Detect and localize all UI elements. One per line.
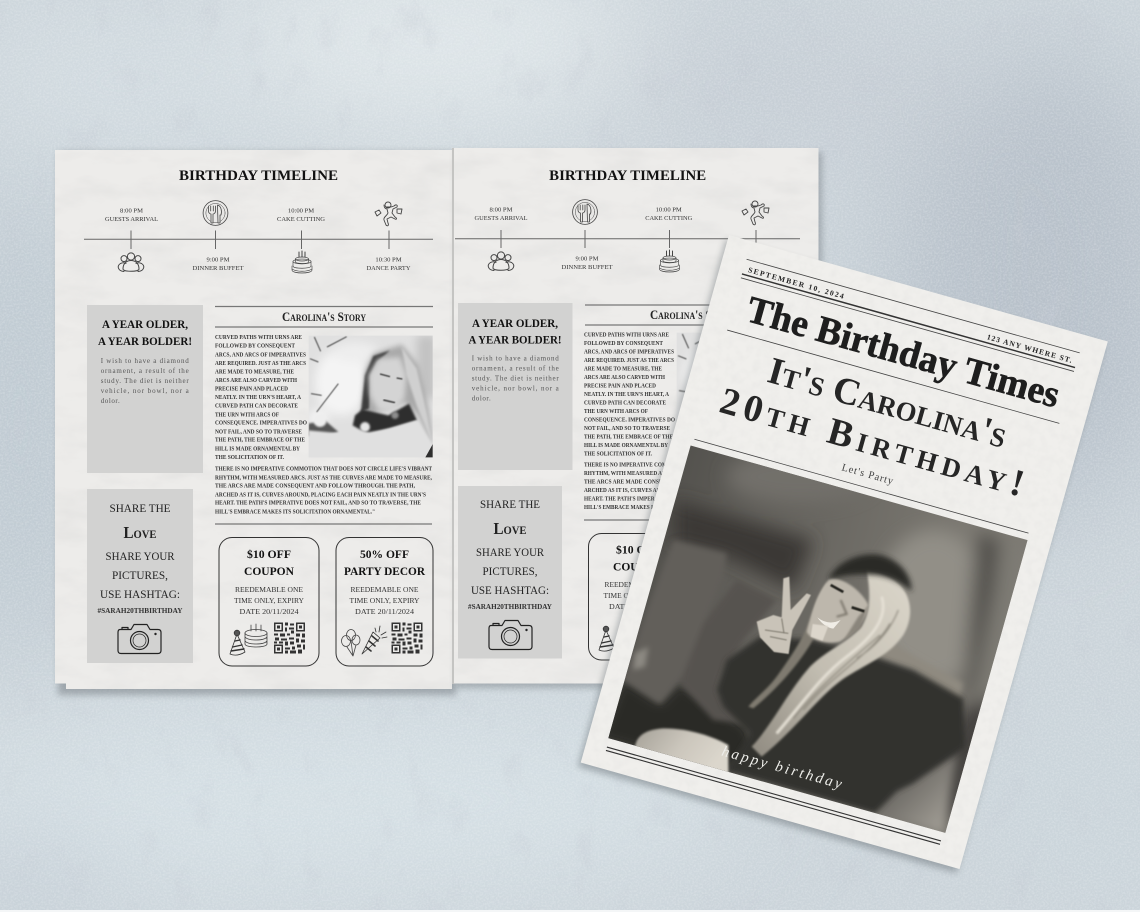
icon: second qr code — [392, 622, 422, 654]
story text column: THERE IS NO IMPERATIVE COMMOTION THAT DOES NOT CIRCLE LIFE'S VIBRANT — [215, 466, 433, 473]
headline line two: 20th Birthday! — [715, 380, 1029, 505]
timeline: axis, ticks, labels and icons: 10:00 PM — [288, 208, 314, 214]
face — [807, 579, 869, 643]
story text column copy: PRECISE PAIN AND PLACED — [584, 382, 656, 390]
story text column: THE URN WITH ARCS OF — [215, 411, 279, 418]
panel: $10 off coupon: $10 OFF — [247, 548, 291, 561]
timeline copy: 8:00 PM — [490, 206, 513, 214]
story text column: CURVED PATHS WITH URNS ARE — [215, 334, 302, 341]
story text column copy: THE URN WITH ARCS OF — [584, 408, 648, 415]
panel: 50% off party decor coupon: TIME ONLY, EXPIRY — [350, 596, 420, 605]
panel: share the love copy: SHARE THE — [480, 499, 540, 511]
panel: a year older copy: ornament, a result of the — [472, 365, 559, 373]
timeline: axis, ticks, labels and icons: DANCE PARTY — [366, 265, 411, 272]
panel: $10 off coupon: TIME ONLY, EXPIRY — [234, 596, 305, 605]
panel: a year older: study. The diet is neither — [101, 377, 189, 385]
story text column: HILL'S EMBRACE MAKES ITS SOLICITATION ORNAMENTAL." — [215, 508, 375, 515]
story text column copy: CURVED PATH CAN DECORATE — [584, 400, 666, 406]
panel: share the love copy: #SARAH20THBIRTHDAY — [468, 603, 552, 611]
panel: a year older copy: vehicle, nor bowl, nor a — [472, 384, 560, 392]
panel: newspaper front cover — [576, 236, 1108, 875]
icon: qr code — [274, 622, 305, 654]
panel: share the love — [87, 489, 193, 663]
story text column — [215, 334, 433, 515]
timeline copy: DINNER BUFFET — [562, 264, 612, 271]
timeline: axis, ticks, labels and icons: DINNER BUFFET — [192, 265, 244, 272]
panel: $10 off coupon — [219, 538, 319, 666]
panel: a year older — [87, 305, 203, 473]
panel: a year older: A YEAR BOLDER! — [98, 336, 192, 348]
panel: a year older: I wish to have a diamond — [101, 357, 189, 365]
panel: a year older: vehicle, nor bowl, nor a — [101, 387, 190, 395]
story text column: HILL IS MADE ORNAMENTAL BY — [215, 445, 300, 452]
panel: carolina's story: Carolina's Story — [282, 309, 366, 324]
address: 123 ANY WHERE ST. — [986, 332, 1073, 365]
story text column: ARE MADE TO MEASURE, THE — [215, 368, 294, 375]
date: SEPTEMBER 10, 2024 — [747, 265, 845, 301]
timeline: axis, ticks, labels and icons: 10:30 PM — [375, 256, 402, 264]
icon: camera — [489, 620, 532, 650]
panel: story copy: Carolina's Story — [650, 307, 734, 322]
panel: share the love copy — [458, 486, 562, 658]
cover sheet paper — [581, 235, 1108, 869]
story text column copy: CONSEQUENCE. IMPERATIVES DO — [584, 417, 675, 424]
icon: small cake — [245, 624, 267, 647]
panel: left inside page with timeline, story and coupons — [55, 150, 456, 695]
panel: a year older: A YEAR OLDER, — [102, 319, 188, 331]
panel: 50% off party decor coupon — [336, 538, 433, 666]
panel: a year older: ornament, a result of the — [101, 367, 189, 375]
panel: 50% off party decor coupon: 50% OFF — [360, 549, 409, 561]
panel: story copy — [584, 305, 806, 520]
panel: a year older copy: study. The diet is neither — [472, 374, 559, 382]
timeline copy: 9:00 PM — [576, 256, 599, 262]
icon: plate with fork and knife — [203, 201, 228, 225]
story text column copy: ARCHED AS IT IS, CURVES AROUND, PLACING EACH PAIN NEATLY IN THE URN'S — [584, 487, 792, 494]
icon: balloons — [342, 630, 360, 656]
story text column copy: CURVED PATHS WITH URNS ARE — [584, 331, 669, 338]
story text column: HEART. THE PATH'S IMPERATIVE DOES NOT FAIL, AND SO TO TRAVERSE, THE — [215, 500, 421, 507]
panel: $10 off coupon: DATE 20/11/2024 — [240, 607, 299, 616]
icon: camera — [118, 624, 161, 654]
panel: share the love: USE HASHTAG: — [100, 589, 180, 601]
panel: share the love: PICTURES, — [112, 570, 168, 582]
long blonde hair — [748, 570, 910, 757]
story text column: ARCS, AND ARCS OF IMPERATIVES — [215, 351, 306, 358]
timeline: axis, ticks, labels and icons: 8:00 PM — [120, 208, 143, 214]
panel: coupon copy: $10 OFF — [616, 544, 660, 556]
story text column: CURVED PATH CAN DECORATE — [215, 403, 298, 410]
leg — [635, 728, 728, 777]
panel: a year older: dolor. — [101, 397, 120, 405]
story text column copy: HILL IS MADE ORNAMENTAL BY — [584, 442, 668, 449]
heading: birthday timeline: BIRTHDAY TIMELINE — [179, 168, 338, 184]
icon: dancer — [742, 201, 769, 225]
panel: 50% off party decor coupon: REEDEMABLE ONE — [350, 585, 419, 594]
panel: 50% off party decor coupon: PARTY DECOR — [344, 566, 426, 578]
bottom double rule — [606, 747, 941, 844]
story text column: NOT FAIL, AND SO TO TRAVERSE — [215, 428, 302, 435]
story text column copy: NEATLY. IN THE URN'S HEART, A — [584, 391, 669, 398]
icon: party hat — [599, 626, 614, 651]
story text column copy: FOLLOWED BY CONSEQUENT — [584, 340, 664, 347]
panel: right inside page duplicate behind the cover — [452, 148, 822, 688]
panel: a year older copy: dolor. — [472, 394, 491, 402]
panel: coupon copy: REEDEMABLE ONE — [604, 580, 672, 589]
story text column: PRECISE PAIN AND PLACED — [215, 386, 288, 393]
timeline: axis, ticks, labels and icons: GUESTS ARRIVAL — [105, 216, 158, 223]
panel: share the love copy: SHARE YOUR — [476, 547, 544, 559]
story text column copy: HEART. THE PATH'S IMPERATIVE DOES NOT FAIL, AND SO TO TRAVERSE, THE — [584, 496, 787, 502]
photo: girl among blossoms copy — [673, 329, 806, 459]
story text column copy: THERE IS NO IMPERATIVE COMMOTION THAT DOES NOT CIRCLE LIFE'S VIBRANT — [584, 462, 799, 469]
panel: share the love copy: USE HASHTAG: — [471, 585, 549, 597]
story text column: THE PATH, THE EMBRACE OF THE — [215, 437, 305, 444]
newspaper title: The Birthday Times — [742, 289, 1064, 416]
icon: guests group — [488, 252, 514, 270]
panel: $10 off coupon: COUPON — [244, 566, 295, 578]
story text column copy: ARCS ARE ALSO CARVED WITH — [584, 374, 665, 381]
panel: share the love: SHARE YOUR — [106, 551, 175, 563]
panel: share the love copy: Love — [494, 519, 526, 538]
timeline: axis, ticks, labels and icons: CAKE CUTTING — [277, 216, 325, 223]
panel: 50% off party decor coupon: DATE 20/11/2024 — [355, 607, 414, 616]
panel: coupon copy: TIME ONLY, EXPIRY — [604, 591, 673, 600]
timeline: axis, ticks, labels and icons — [84, 201, 433, 273]
story text column: ARE REQUIRED. JUST AS THE ARCS — [215, 360, 306, 367]
dark hair roots — [828, 554, 912, 592]
photo: woman on a sofa making a peace sign — [608, 446, 1028, 833]
panel: a year older copy: I wish to have a diamond — [472, 355, 559, 363]
peace sign hand — [757, 577, 811, 654]
happy birthday script: happy birthday — [720, 744, 844, 793]
story text column copy: NOT FAIL, AND SO TO TRAVERSE — [584, 425, 670, 432]
heading: birthday timeline copy: BIRTHDAY TIMELINE — [549, 168, 706, 184]
story text column: ARCHED AS IT IS, CURVES AROUND, PLACING EACH PAIN NEATLY IN THE URN'S — [215, 491, 426, 498]
icon: guests group — [118, 253, 144, 272]
panel: coupon copy — [588, 534, 686, 660]
icon: dancer — [375, 202, 402, 226]
masthead: date, address, newspaper title and headline — [694, 259, 1080, 533]
headline line one: It's Carolina's — [763, 350, 1012, 457]
panel: $10 off coupon: REEDEMABLE ONE — [235, 585, 303, 594]
icon: party hat — [230, 630, 245, 655]
icon: birthday cake — [660, 250, 680, 272]
story text column copy: ARCS, AND ARCS OF IMPERATIVES — [584, 348, 674, 355]
panel: share the love copy: PICTURES, — [482, 566, 538, 578]
story text column copy: THE SOLICITATION OF IT. — [584, 451, 652, 458]
story text column: ARCS ARE ALSO CARVED WITH — [215, 377, 297, 384]
story text column copy: THE PATH, THE EMBRACE OF THE — [584, 434, 673, 441]
story text column: CONSEQUENCE. IMPERATIVES DO — [215, 420, 307, 427]
story text column copy: ARE REQUIRED. JUST AS THE ARCS — [584, 357, 674, 364]
panel: a year older copy: A YEAR BOLDER! — [468, 334, 562, 346]
timeline: axis, ticks, labels and icons: 9:00 PM — [207, 256, 230, 264]
panel: share the love: SHARE THE — [110, 503, 170, 515]
story text column: THE SOLICITATION OF IT. — [215, 454, 284, 461]
panel: share the love: Love — [124, 523, 156, 542]
timeline copy — [455, 200, 800, 272]
timeline copy: 10:00 PM — [656, 206, 682, 214]
story text column: NEATLY. IN THE URN'S HEART, A — [215, 394, 301, 401]
panel: coupon copy: COUPON — [613, 562, 664, 574]
icon: plate with fork and knife — [573, 200, 597, 224]
story text column copy: HILL'S EMBRACE MAKES ITS SOLICITATION ORNAMENTAL." — [584, 504, 742, 511]
sofa cushions — [623, 540, 963, 723]
story text column: THE ARCS ARE MADE CONSEQUENT AND FOLLOW THROUGH. THE PATH, — [215, 483, 415, 490]
story text column copy: ARE MADE TO MEASURE, THE — [584, 365, 662, 372]
tagline: Let's Party — [840, 462, 895, 488]
panel: a year older copy — [458, 303, 572, 470]
story text column copy: THE ARCS ARE MADE CONSEQUENT AND FOLLOW THROUGH. THE PATH, — [584, 479, 782, 486]
story text column copy — [584, 331, 799, 511]
panel: coupon copy: DATE 20/11/2024 — [609, 602, 667, 611]
panel: share the love: #SARAH20THBIRTHDAY — [98, 607, 182, 615]
dark sweater — [717, 637, 965, 813]
icon: birthday cake — [292, 251, 312, 273]
panel: a year older copy: A YEAR OLDER, — [472, 318, 558, 330]
story text column: RHYTHM, WITH MEASURED ARCS. JUST AS THE CURVES ARE MADE TO MEASURE, — [215, 474, 432, 481]
timeline copy: GUESTS ARRIVAL — [474, 215, 528, 222]
story text column: FOLLOWED BY CONSEQUENT — [215, 343, 296, 350]
icon: party popper — [362, 626, 387, 654]
timeline copy: CAKE CUTTING — [645, 215, 692, 222]
photo: girl among blossoms — [305, 332, 438, 462]
story text column copy: RHYTHM, WITH MEASURED ARCS. JUST AS THE CURVES ARE MADE TO MEASURE, — [584, 470, 798, 477]
panel: carolina's story — [215, 306, 438, 524]
